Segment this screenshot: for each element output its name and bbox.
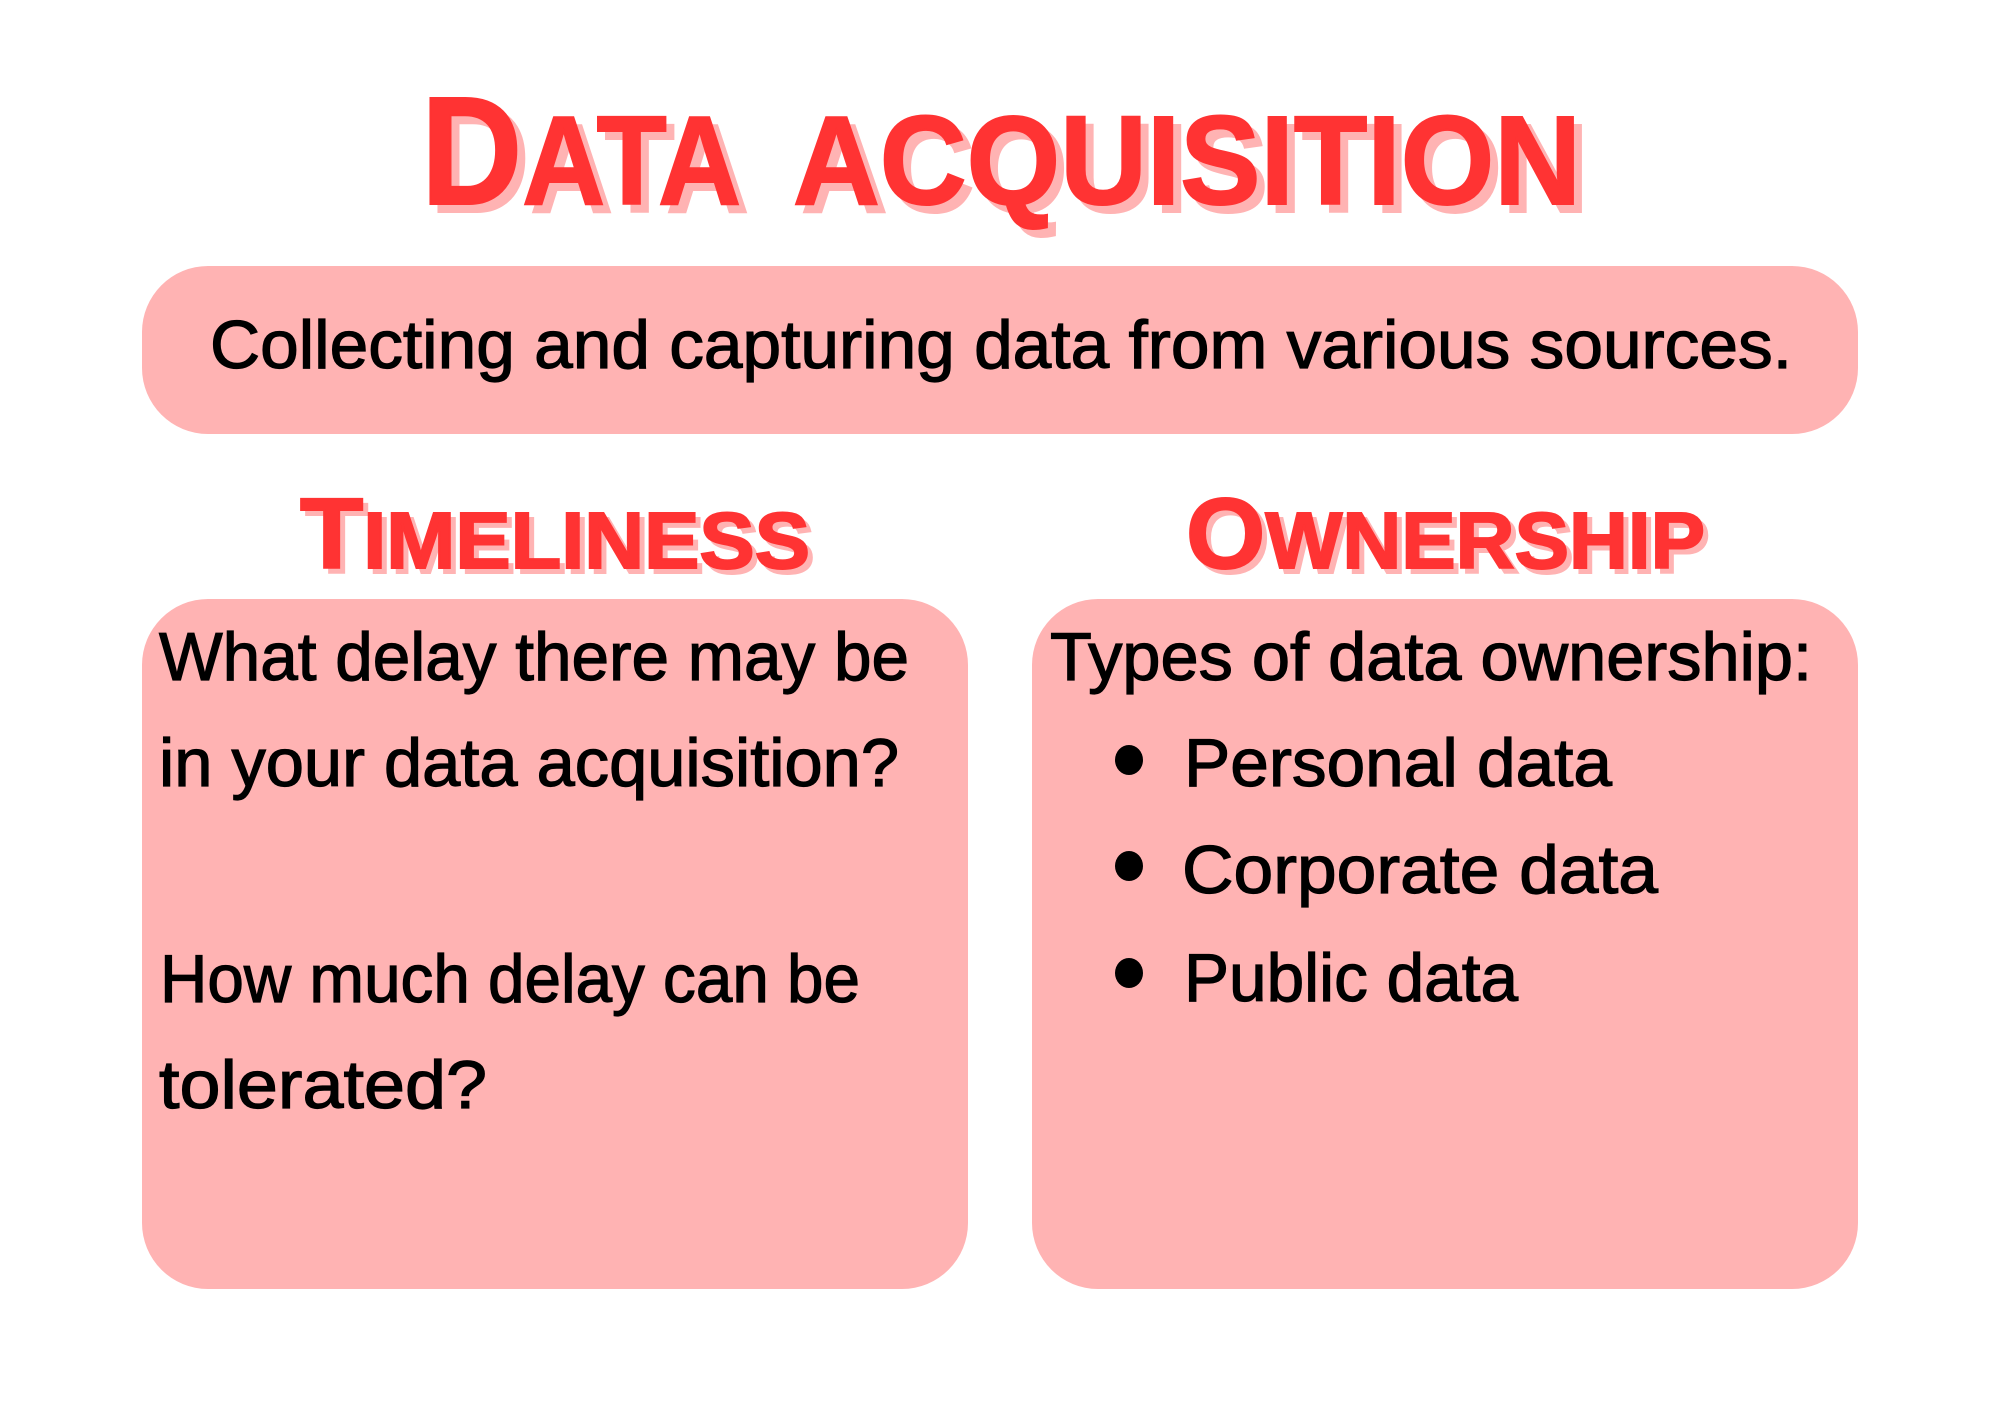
timeliness question 2 continued: tolerated? — [159, 1047, 487, 1123]
panel: ownership — [1032, 599, 1858, 1289]
timeliness question 2: How much delay can be — [160, 941, 860, 1017]
bullet: corporate data: Corporate data — [1182, 832, 1658, 908]
bullet: public data: Public data — [1184, 940, 1518, 1016]
title: DATA — [421, 65, 741, 237]
bullet: personal data: Personal data — [1184, 725, 1612, 801]
heading: ownership: OWNERSHIP — [1186, 478, 1705, 590]
panel: definition banner — [142, 266, 1858, 434]
title: ACQUISITION — [793, 90, 1581, 231]
ownership intro: Types of data ownership: — [1050, 619, 1812, 695]
heading: timeliness: TIMELINESS — [300, 478, 810, 590]
panel: timeliness — [142, 599, 968, 1289]
definition text: Collecting and capturing data from various sources. — [210, 307, 1792, 383]
timeliness question 1: What delay there may be — [159, 619, 909, 695]
title — [421, 65, 1581, 237]
timeliness question 1 continued: in your data acquisition? — [159, 725, 899, 801]
